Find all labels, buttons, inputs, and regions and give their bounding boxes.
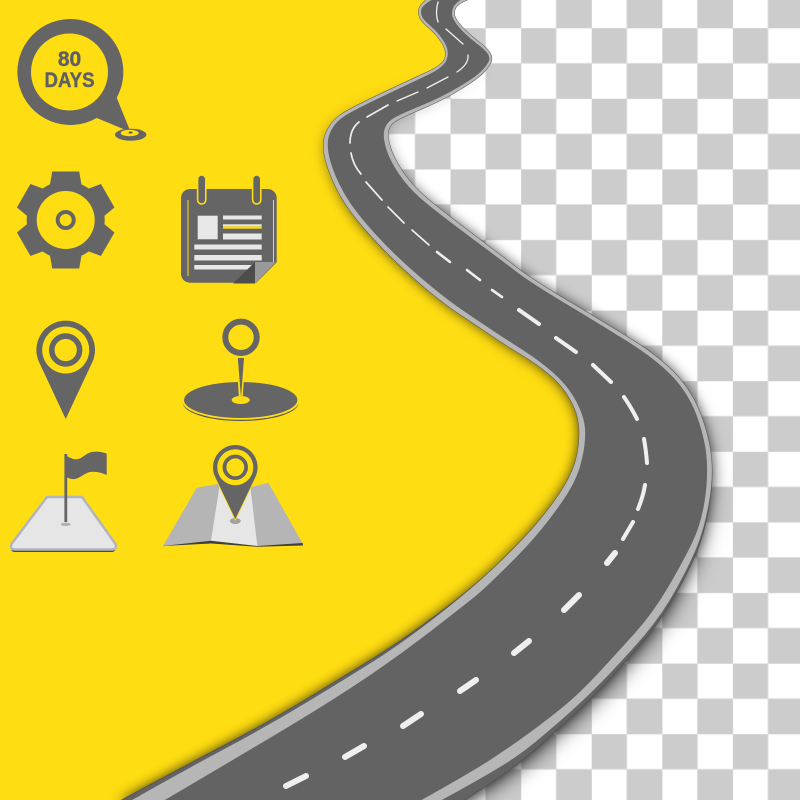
flag: [65, 452, 107, 479]
calendar page curl: [233, 262, 280, 286]
icon: pin on disk: [182, 322, 299, 421]
road shoulders: [125, 0, 712, 800]
icon: calendar: [181, 175, 280, 286]
folded map: [163, 483, 303, 547]
icon: 80 days marker: [17, 19, 146, 141]
calendar body: [181, 189, 277, 283]
flag base shadow: [61, 523, 71, 526]
disk: [182, 382, 299, 421]
pin ring: [225, 322, 257, 353]
marker base: [115, 129, 146, 141]
yellow background panel: [0, 0, 579, 800]
pin shadow: [230, 518, 241, 524]
winding road: [118, 0, 712, 800]
marker ring with tail: [17, 19, 131, 132]
map pin: [213, 445, 258, 520]
road base edge: [118, 0, 712, 800]
text: 80 days: 80: [58, 48, 81, 71]
road shadow: [118, 0, 717, 800]
asphalt surface: [158, 0, 707, 800]
road centre dashes: [286, 2, 647, 786]
calendar rings: [198, 175, 261, 204]
text: 80 days: [44, 48, 94, 92]
calendar text lines: [194, 216, 262, 270]
icon: location pin: [36, 321, 95, 419]
icon: gear: [16, 172, 116, 268]
flag pole: [64, 454, 67, 522]
plate: [11, 497, 116, 552]
needle: [236, 358, 246, 399]
icon: map with pin: [163, 445, 303, 547]
icon: flag on plate: [11, 452, 116, 552]
text: 80 days: DAYS: [44, 69, 94, 92]
